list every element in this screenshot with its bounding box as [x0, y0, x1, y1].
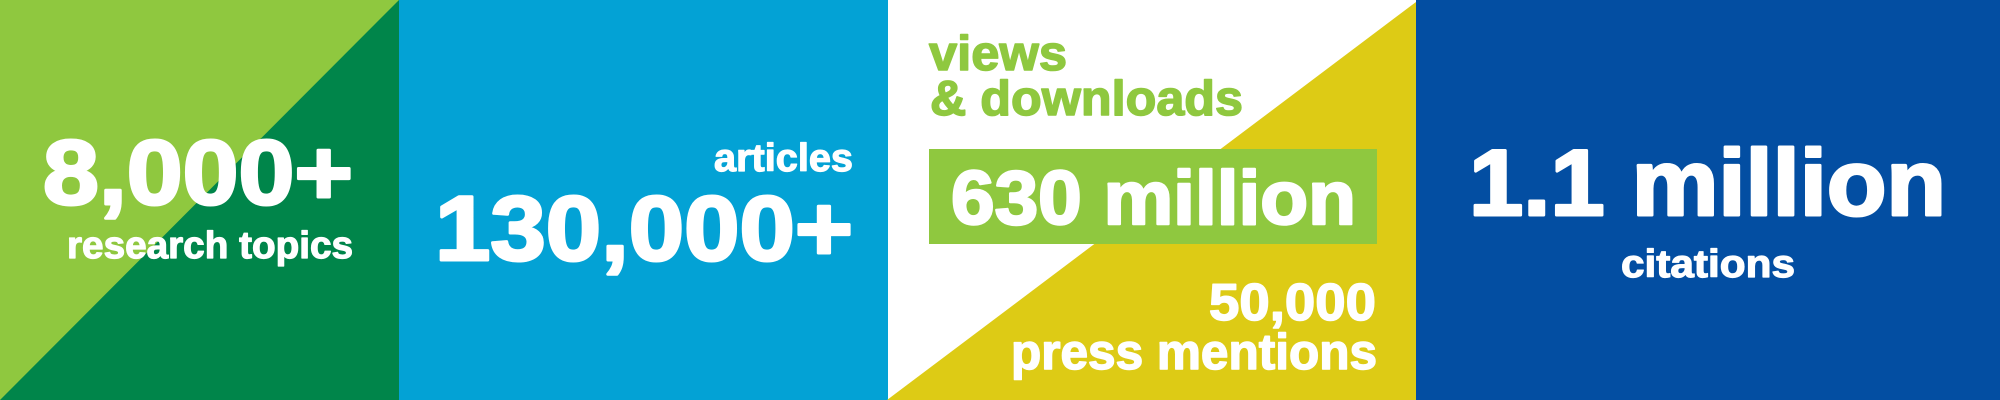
label: research topics: research topics	[67, 225, 353, 267]
panel: articles	[399, 0, 888, 400]
label: views & downloads	[929, 27, 1243, 126]
panel: research topics	[0, 0, 399, 400]
stat: 1.1 million: 1.1 million	[1469, 130, 1946, 235]
label: views & downloads: views	[929, 27, 1067, 81]
panel: views and press mentions	[887, 0, 1416, 400]
label: press mentions: press mentions	[1011, 324, 1377, 380]
yellow triangle	[887, 2, 1416, 400]
label: views & downloads: & downloads	[930, 72, 1243, 126]
highlight box: 630 million: 630 million	[951, 156, 1356, 241]
stat: 130,000+: 130,000+	[435, 178, 853, 280]
label: articles: articles	[714, 137, 853, 180]
light green triangle	[0, 0, 399, 400]
panel: citations	[1416, 0, 2000, 400]
stat: 8,000+: 8,000+	[43, 122, 353, 224]
stat: 50,000: 50,000	[1209, 274, 1376, 332]
label: citations: citations	[1621, 243, 1795, 286]
